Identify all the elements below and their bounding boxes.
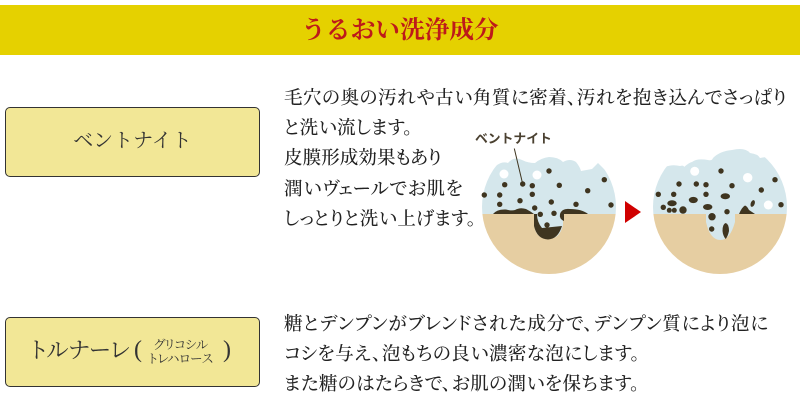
text block: trehalose description (284, 314, 769, 395)
arrow (625, 201, 641, 223)
pit (534, 213, 563, 239)
bubbles (500, 170, 542, 180)
text block: trehalose description: また糖のはたらきで、お肌の潤いを保ちます。 (284, 375, 640, 395)
title: うるおい洗浄成分 (301, 17, 499, 44)
pit (706, 213, 735, 240)
text block: bentonite description: 潤いヴェールでお肌を (284, 180, 464, 200)
text block: bentonite description: 皮膜形成効果もあり (284, 149, 442, 169)
diagram: before cleansing (480, 157, 620, 274)
dirt: surface right (560, 209, 588, 221)
label text: bentonite: ベントナイト (73, 130, 192, 152)
text block: trehalose description: 糖とデンプンがブレンドされた成分で、デンプン質により泡に (284, 315, 769, 335)
particles (482, 168, 614, 228)
label text: open bracket: ( (134, 337, 142, 363)
text block: bentonite description (284, 88, 787, 230)
label text: sub name: グリコシル (154, 338, 208, 352)
particles (656, 168, 784, 239)
title banner (0, 5, 800, 55)
dirt: surface left (493, 208, 534, 214)
diagram: after cleansing (650, 149, 790, 274)
text block: trehalose description: コシを与え、泡もちの良い濃密な泡にします。 (284, 345, 640, 365)
label text: close bracket: ) (223, 337, 231, 363)
text block: bentonite description: と洗い流します。 (284, 119, 413, 139)
label text: sub name: トレハロース (149, 352, 213, 366)
label text: main name: トルナーレ (31, 338, 129, 363)
text block: bentonite description: しっとりと洗い上げます。 (284, 210, 476, 230)
label box: trehalose glycosyl (5, 317, 260, 387)
leader line (514, 148, 523, 184)
label box: bentonite (5, 107, 260, 177)
label text: sub name (149, 338, 213, 366)
diagram: bentonite cleansing (476, 132, 787, 274)
diagram label: ベントナイト (475, 131, 552, 146)
dirt: pit bottom (534, 214, 562, 240)
text block: bentonite description: 毛穴の奥の汚れや古い角質に密着、汚れを抱き込んでさっぱり (284, 89, 787, 109)
bubbles (690, 167, 773, 210)
